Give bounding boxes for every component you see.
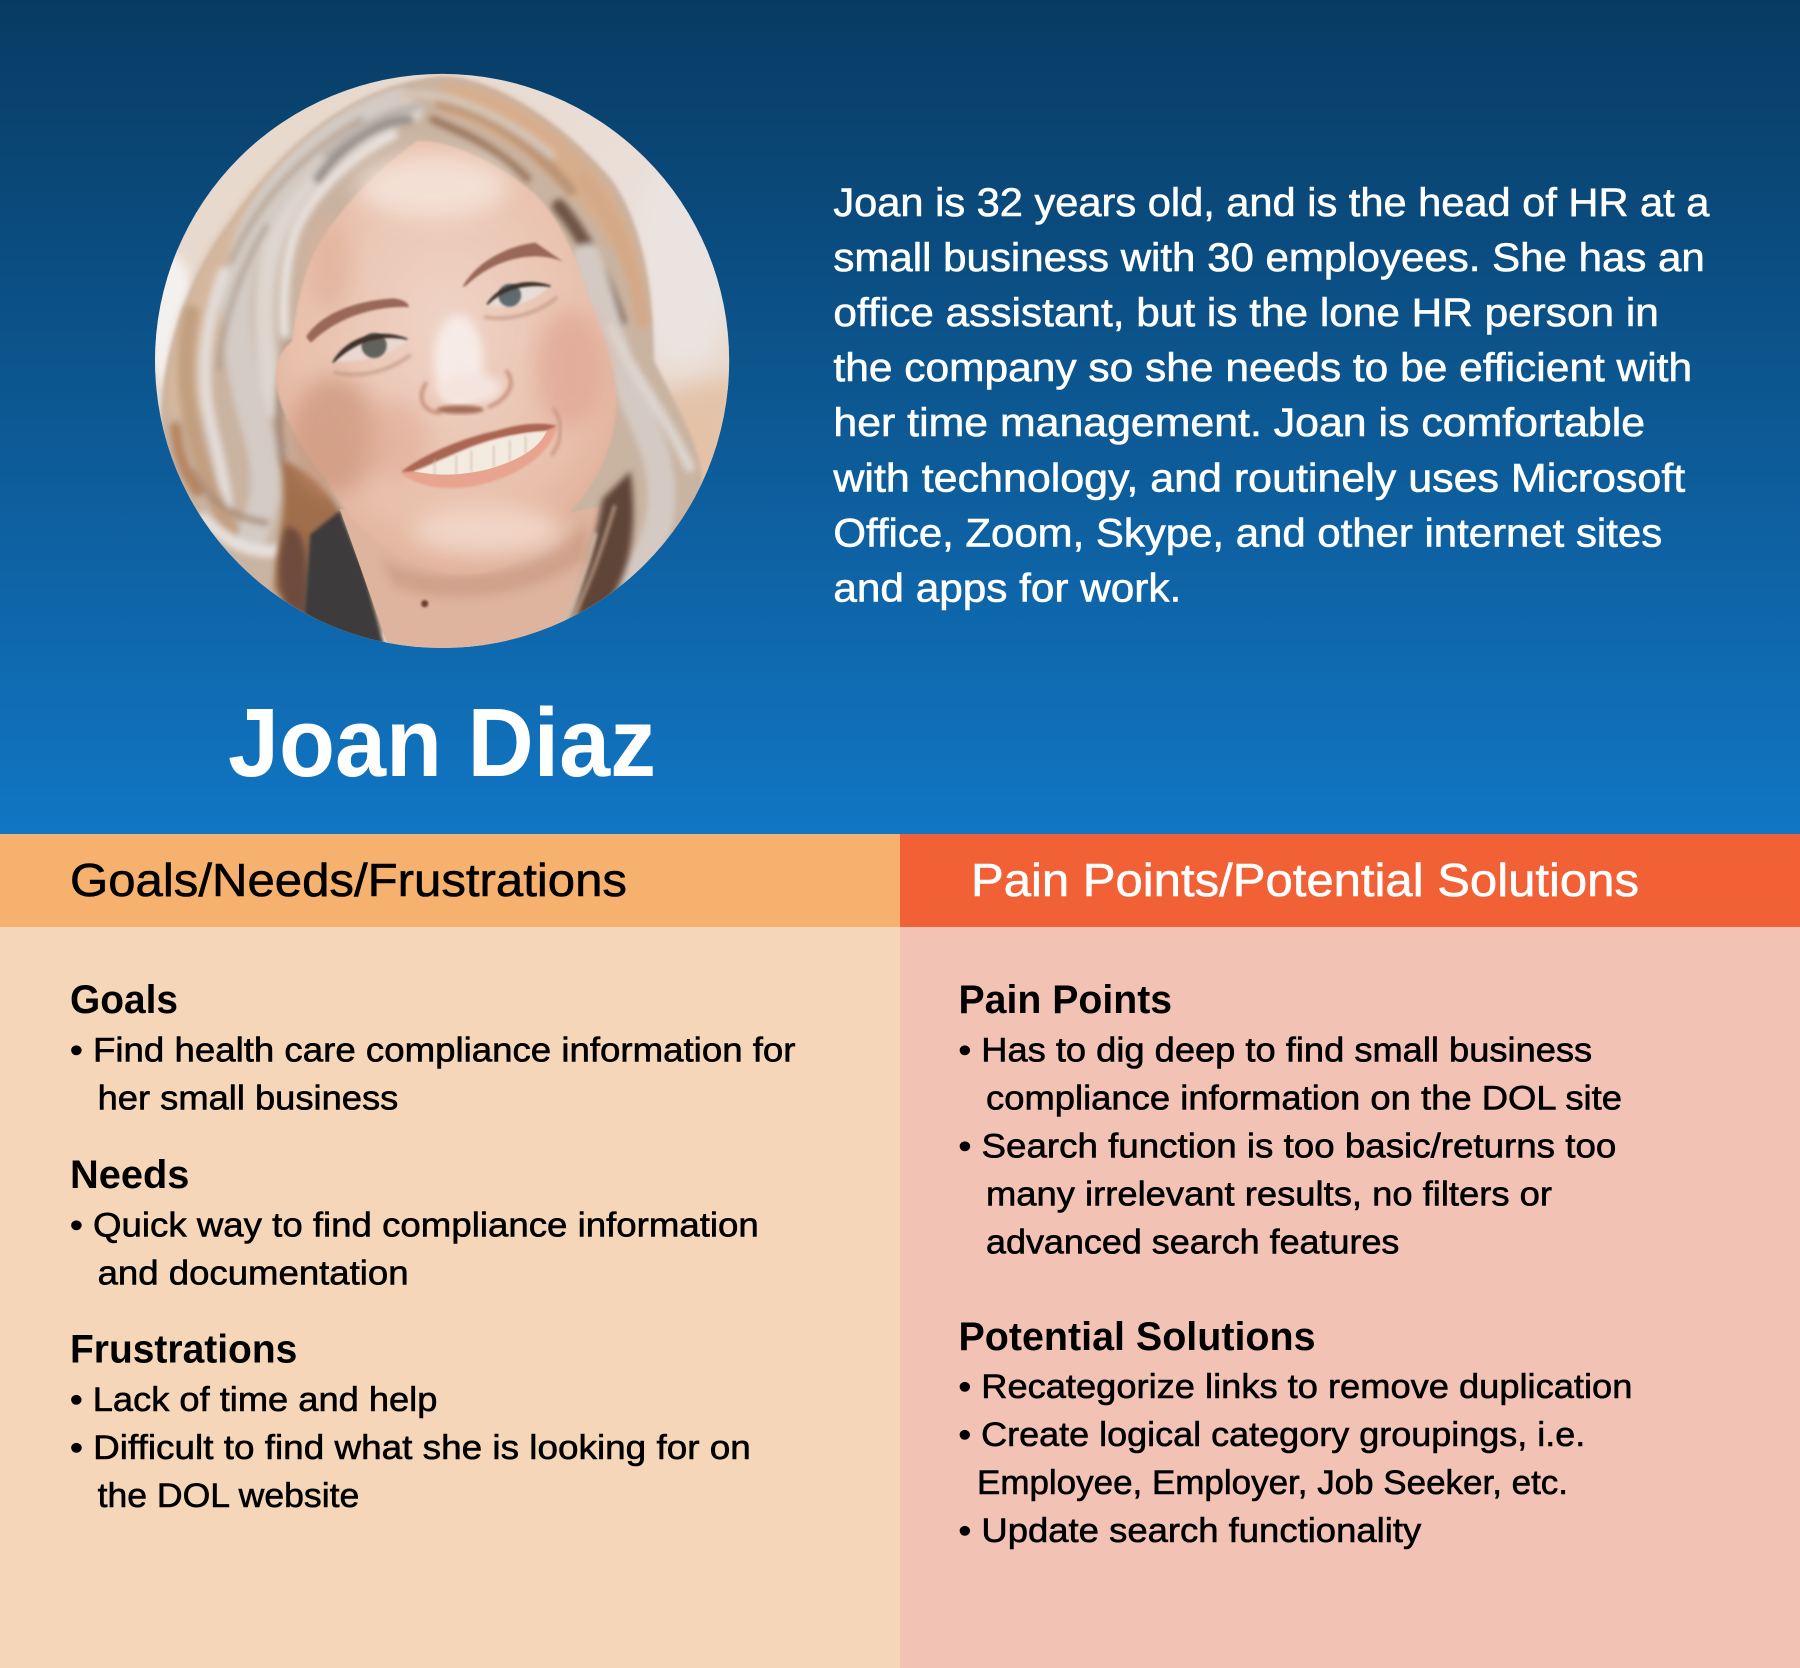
needs block: and documentation [98,1254,409,1292]
frustrations block: • Lack of time and help [70,1381,437,1419]
biography text: Joan is 32 years old, and is the head of HR at a [833,181,1709,225]
brows [306,298,409,343]
potential solutions block: • Recategorize links to remove duplication [958,1368,1632,1406]
potential solutions block: • Update search functionality [958,1512,1421,1550]
pain points block: compliance information on the DOL site [986,1080,1622,1118]
face [276,141,617,574]
frustrations block: Frustrations [70,1328,297,1372]
neck and chest [340,507,599,649]
panel: pain points, potential solutions [900,834,1800,1668]
frustrations block [70,1328,751,1515]
right panel heading: Pain Points/Potential Solutions [971,854,1639,906]
needs block [70,1153,759,1292]
pain points block: many irrelevant results, no filters or [986,1176,1552,1214]
pain points block: • Has to dig deep to find small business [958,1032,1592,1070]
goals block: Goals [70,978,178,1022]
potential solutions block: Employee, Employer, Job Seeker, etc. [977,1464,1568,1502]
pain points block: advanced search features [986,1224,1399,1262]
frustrations block: the DOL website [98,1477,359,1515]
needs block: Needs [70,1153,189,1197]
pain points block: Pain Points [958,978,1172,1022]
right panel body [900,927,1800,1668]
biography text: the company so she needs to be efficient with [833,346,1692,390]
biography text: office assistant, but is the lone HR person in [833,291,1659,335]
potential solutions block [958,1315,1632,1550]
hair strands right [401,94,690,590]
left panel band [0,834,900,927]
needs block: • Quick way to find compliance information [70,1206,759,1244]
eyes [336,336,407,361]
dark top [304,511,385,649]
portrait photo of Joan [155,74,730,648]
pain points block: • Search function is too basic/returns too [958,1128,1616,1166]
frustrations block: • Difficult to find what she is looking for on [70,1429,751,1467]
header background [0,0,1800,834]
right panel band [900,834,1800,927]
lower hair shadows near ear [274,459,342,621]
potential solutions block: Potential Solutions [958,1315,1316,1359]
panel: goals, needs, frustrations [0,834,900,1668]
name heading: Joan Diaz [228,688,656,797]
left panel body [0,927,900,1668]
goals block: • Find health care compliance information for [70,1032,796,1070]
left panel heading: Goals/Needs/Frustrations [70,854,627,906]
hair strands left [176,103,417,551]
pain points block [958,978,1622,1262]
biography text: Office, Zoom, Skype, and other internet sites [833,511,1662,555]
potential solutions block: • Create logical category groupings, i.e. [958,1416,1585,1454]
nose [434,315,483,406]
biography text [832,181,1709,610]
biography text: and apps for work. [833,566,1181,610]
goals block: her small business [98,1080,398,1118]
biography text: her time management. Joan is comfortable [833,401,1645,445]
biography text: small business with 30 employees. She has an [833,236,1705,280]
mouth [401,425,557,488]
biography text: with technology, and routinely uses Microsoft [832,456,1685,500]
right lower dark hair [575,471,633,621]
goals block [70,978,796,1118]
